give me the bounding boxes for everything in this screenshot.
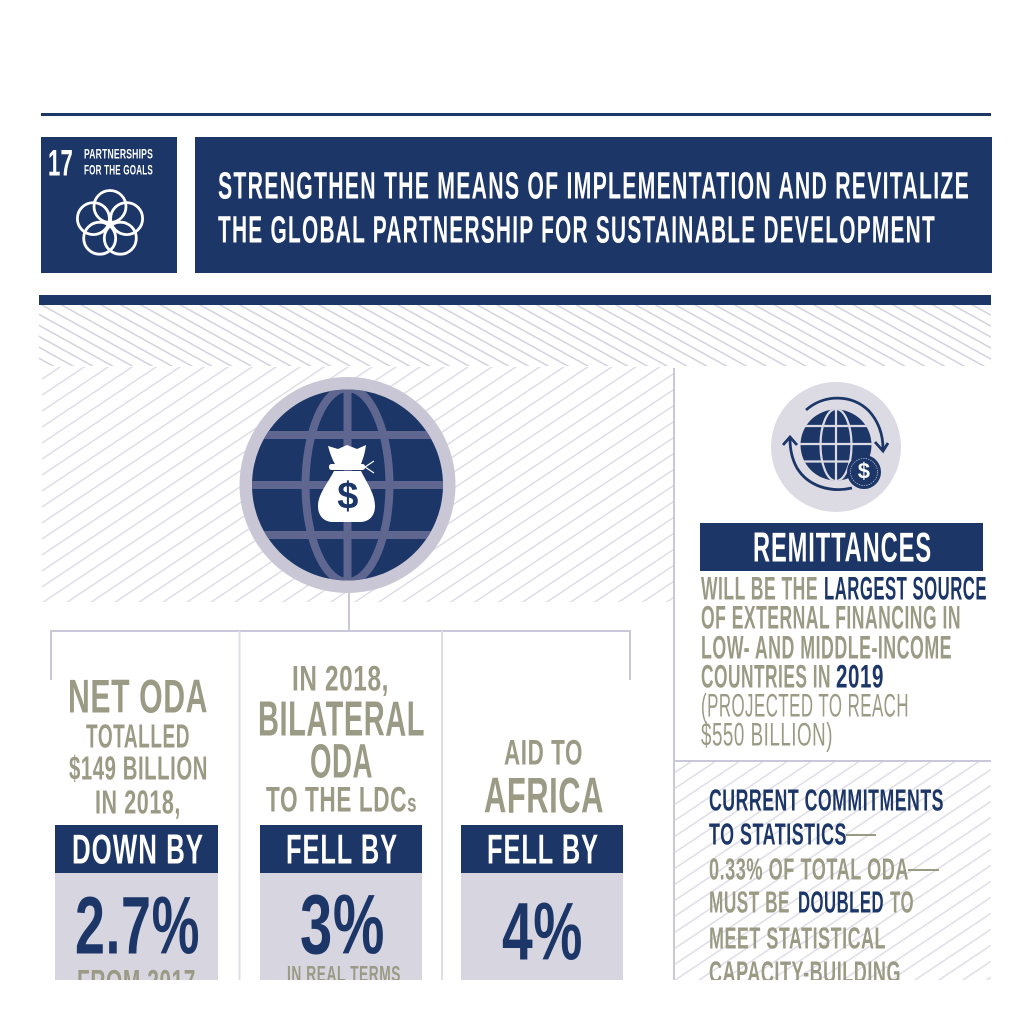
arrows bbox=[783, 398, 888, 490]
stat: 4% bbox=[461, 873, 623, 980]
banner: fell by bbox=[260, 825, 422, 873]
banner: remittances bbox=[700, 523, 983, 571]
column heading: AID TO bbox=[504, 734, 583, 772]
banner: fell by: FELL BY bbox=[487, 826, 599, 872]
column heading bbox=[68, 670, 208, 820]
column: bilateral ODA bbox=[258, 660, 425, 986]
column heading bbox=[484, 740, 603, 813]
column heading bbox=[258, 660, 425, 820]
icon: money bag: $ bbox=[337, 476, 359, 518]
stat: 2.7% bbox=[55, 873, 218, 980]
stat: 2.7%: 2.7% bbox=[75, 880, 200, 972]
remittances text: COUNTRIES IN bbox=[701, 658, 831, 694]
stat: 3% bbox=[260, 873, 422, 986]
icon: globe with remittance arrows and coin bbox=[771, 382, 901, 512]
banner: fell by bbox=[461, 825, 623, 873]
stat: 3%: IN REAL TERMS bbox=[287, 962, 401, 986]
title banner bbox=[195, 137, 992, 273]
goal name: PARTNERSHIPS bbox=[84, 146, 153, 162]
column: net ODA bbox=[55, 670, 218, 1000]
icon: money bag bbox=[318, 445, 375, 522]
banner: fell by: FELL BY bbox=[286, 826, 398, 872]
remittances text bbox=[701, 570, 987, 752]
statistics note: TO bbox=[890, 884, 914, 920]
statistics note: TO STATISTICS bbox=[709, 816, 847, 852]
remittances text: 2019 bbox=[836, 658, 884, 694]
statistics note bbox=[709, 782, 944, 990]
column heading: AFRICA bbox=[484, 768, 604, 824]
column heading: $149 BILLION bbox=[69, 750, 208, 786]
icon: globe with money bag bbox=[240, 377, 456, 593]
SDG 17 badge bbox=[41, 137, 177, 273]
column heading: TO THE LDCs bbox=[266, 780, 417, 820]
goal number: 17 bbox=[48, 142, 73, 184]
statistics note: DOUBLED bbox=[798, 884, 884, 920]
column heading: ODA bbox=[310, 736, 373, 788]
goal name: FOR THE GOALS bbox=[84, 162, 153, 178]
column heading: IN 2018, bbox=[95, 784, 181, 820]
banner: down by bbox=[55, 825, 218, 873]
remittances text: WILL BE THE bbox=[701, 570, 818, 606]
column: aid to Africa bbox=[461, 734, 623, 980]
banner: down by: DOWN BY bbox=[72, 826, 204, 872]
stat: 4%: 4% bbox=[502, 886, 583, 978]
goal name bbox=[84, 146, 153, 178]
column heading: IN 2018, bbox=[292, 660, 389, 698]
column heading: BILATERAL bbox=[258, 692, 425, 746]
column heading: NET ODA bbox=[68, 670, 208, 722]
coin: $ bbox=[858, 458, 870, 484]
stat: 3%: 3% bbox=[300, 878, 385, 972]
stat: 2.7%: FROM 2017 bbox=[77, 964, 196, 1000]
connector tree bbox=[51, 593, 630, 680]
thick divider band bbox=[39, 295, 991, 305]
statistics note: MEET STATISTICAL bbox=[709, 920, 886, 956]
globe bbox=[800, 408, 873, 482]
column heading: TOTALLED bbox=[86, 718, 190, 754]
remittances text: $550 BILLION) bbox=[701, 716, 833, 752]
top rule bbox=[41, 113, 991, 116]
icon: five-ring flower bbox=[77, 190, 143, 254]
statistics note: MUST BE bbox=[709, 884, 790, 920]
